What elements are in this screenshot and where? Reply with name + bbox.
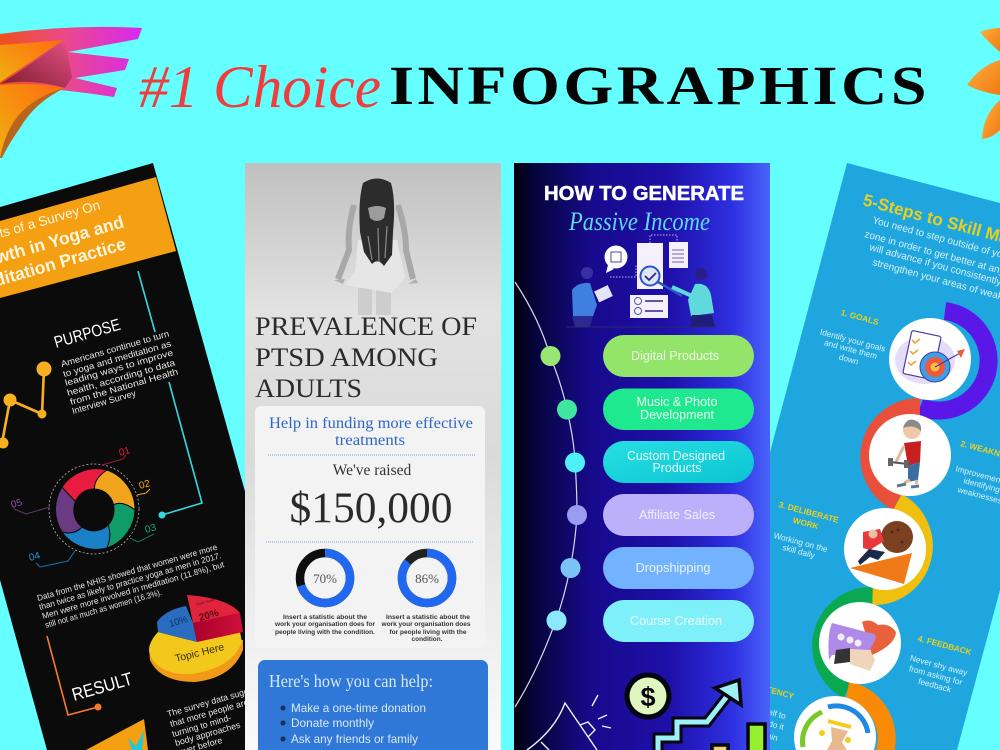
purpose text: health, according to data <box>66 357 176 398</box>
donut chart <box>49 464 139 554</box>
winding ring path <box>821 311 989 750</box>
icon: orange line chart <box>0 362 52 448</box>
statistic caption 1 <box>274 614 375 636</box>
statistic caption 1: people living with the condition. <box>275 629 375 636</box>
icon: right star decoration <box>967 28 1000 139</box>
step 4 label: 4. FEEDBACK <box>917 633 973 657</box>
icon: goals target <box>895 330 965 384</box>
panel: passive income <box>514 163 770 750</box>
statistic caption 2: for people living with the <box>390 629 467 636</box>
panel: PTSD prevalence <box>245 163 501 750</box>
step 3 label: WORK <box>792 515 820 531</box>
button: music and photo <box>603 388 754 430</box>
statistic caption 2: Insert a statistic about the <box>386 614 470 621</box>
bar chart <box>712 724 765 750</box>
pie chart: Topic Here <box>195 597 215 607</box>
statistic caption 1: work your organisation does for <box>274 621 375 628</box>
result text: body approaches <box>174 720 242 748</box>
donut labels: 05 <box>10 497 24 511</box>
NHIS paragraph: Data from the NHIS showed that women were more <box>36 542 219 603</box>
button: affiliate sales: Affiliate Sales <box>639 508 715 522</box>
help card <box>258 660 488 750</box>
pie chart: 20% <box>198 608 220 624</box>
statistic caption 2: work your organisation does <box>381 621 471 628</box>
step 1 label: 1. GOALS <box>840 307 880 327</box>
header text <box>0 197 128 297</box>
heading: PTSD AMONG <box>255 343 438 372</box>
purpose text: from the National Health <box>69 366 179 407</box>
icon: weightlifter <box>888 420 921 487</box>
person right <box>672 268 715 327</box>
icon: megaphone <box>527 695 611 750</box>
button: dropshipping: Dropshipping <box>636 561 711 575</box>
orange result bracket <box>47 636 98 715</box>
purpose text: to yoga and meditation as <box>62 338 173 379</box>
NHIS paragraph: Men were more involved in meditation (11.8%), but <box>41 559 226 621</box>
button: course creation <box>603 600 754 642</box>
step 5 label: Push yourself to <box>727 696 787 721</box>
help list: Make a one-time donation <box>291 701 426 715</box>
header band <box>0 177 176 298</box>
donut labels: 02 <box>138 478 152 492</box>
step 5 label: again <box>757 728 779 743</box>
pie chart: Topic Here <box>174 641 226 665</box>
purpose text <box>60 328 179 416</box>
orange corner block with icon <box>86 719 148 750</box>
button: course creation: Course Creation <box>630 614 722 628</box>
donut labels: 03 <box>144 522 158 536</box>
button: custom designed <box>603 441 754 483</box>
pie chart <box>149 595 243 682</box>
cyan connector line <box>138 271 202 515</box>
help list: Donate monthly <box>291 716 374 730</box>
timeline line <box>515 282 577 707</box>
icon: hourglass cycle <box>803 706 868 750</box>
step 4 label <box>908 633 973 695</box>
donut 86%: 86% <box>415 571 439 586</box>
step circles <box>794 318 971 750</box>
card heading: treatments <box>335 432 405 449</box>
icon: feedback hand and heart <box>828 621 896 671</box>
timeline dots <box>540 346 587 630</box>
purpose text: Interview Survey <box>71 388 138 416</box>
statistic caption 1: Insert a statistic about the <box>283 614 367 621</box>
icon: left flame decoration <box>0 27 142 158</box>
step 1 label: down <box>838 352 860 367</box>
button: affiliate sales <box>603 494 754 536</box>
NHIS paragraph: still not as much as women (16.3%). <box>44 587 163 630</box>
purpose text: Americans continue to turn <box>60 328 170 369</box>
result text: The survey data suggests <box>166 681 266 719</box>
fundraising card <box>255 406 485 648</box>
button: digital products: Digital Products <box>631 349 719 363</box>
donut 70% <box>300 553 350 603</box>
button: dropshipping <box>603 547 754 589</box>
card heading <box>269 415 473 449</box>
panel: 5 steps to skill mastery <box>726 163 1000 750</box>
donut labels <box>10 445 158 567</box>
step 1 label: and write them <box>823 337 878 361</box>
photo: seated woman <box>334 178 418 315</box>
donut 86% <box>402 553 452 603</box>
icon: dollar coin <box>624 672 672 720</box>
heading: HOW TO GENERATE <box>544 183 744 205</box>
heading: PREVALENCE OF <box>255 312 477 341</box>
statistic caption 2 <box>381 614 471 643</box>
donut 70%: 70% <box>313 571 337 586</box>
button: custom designed: Products <box>652 461 702 475</box>
title <box>139 54 930 120</box>
step 5 label: always do it <box>741 711 786 732</box>
button: custom designed: Custom Designed <box>627 449 725 463</box>
step 1 label: Identify your goals <box>819 327 887 354</box>
step 4 label: from asking for <box>908 663 964 687</box>
statistic caption 2: condition. <box>412 636 443 643</box>
step labels <box>726 307 1000 743</box>
icon: dollar coin: $ <box>640 682 656 712</box>
pie chart: 10% <box>168 614 190 630</box>
donut labels: 04 <box>28 550 42 564</box>
NHIS paragraph: than twice as likely to practice yoga as men in 2017. <box>38 550 222 612</box>
step 3 label: 3. DELIBERATE <box>778 499 840 525</box>
help list <box>280 701 426 746</box>
step 2 label <box>954 438 1000 506</box>
button: digital products <box>603 335 754 377</box>
result heading: RESULT <box>70 669 135 705</box>
title serif part: INFOGRAPHICS <box>389 55 930 116</box>
illustration: two people reviewing documents <box>566 235 716 327</box>
panel: yoga and meditation survey <box>0 163 266 750</box>
raised label: We've raised <box>333 462 412 479</box>
icon: boulder on slope <box>850 521 913 584</box>
raised amount: $150,000 <box>290 485 452 532</box>
button: music and photo: Development <box>640 408 715 422</box>
step 4 label: Never shy away <box>909 653 969 678</box>
heading <box>255 312 477 403</box>
icon: rising arrow <box>658 680 741 750</box>
card heading: Help in funding more effective <box>269 415 473 432</box>
button: music and photo: Music & Photo <box>636 395 718 409</box>
donut labels: 01 <box>118 445 132 459</box>
heading: ADULTS <box>255 374 362 403</box>
help heading: Here's how you can help: <box>269 671 433 691</box>
title script part: #1 Choice <box>139 54 381 120</box>
step 5 label: 5. CONSISTENCY <box>726 673 796 701</box>
help list: Ask any friends or family <box>291 732 418 746</box>
script subheading: Passive Income <box>568 207 710 236</box>
step 5 label <box>726 673 796 743</box>
result text: turning to mind- <box>171 712 232 739</box>
step 3 label <box>773 499 840 560</box>
intro text <box>863 215 1000 308</box>
result text: that more people are <box>169 697 250 729</box>
step 4 label: feedback <box>917 676 953 695</box>
step 3 label: skill daily <box>781 542 817 560</box>
person left <box>572 267 613 327</box>
step 3 label: Working on the <box>773 530 829 554</box>
purpose text: leading ways to improve <box>64 347 174 388</box>
result text <box>166 681 266 750</box>
step 1 label <box>819 307 887 367</box>
purpose heading: PURPOSE <box>52 316 122 352</box>
